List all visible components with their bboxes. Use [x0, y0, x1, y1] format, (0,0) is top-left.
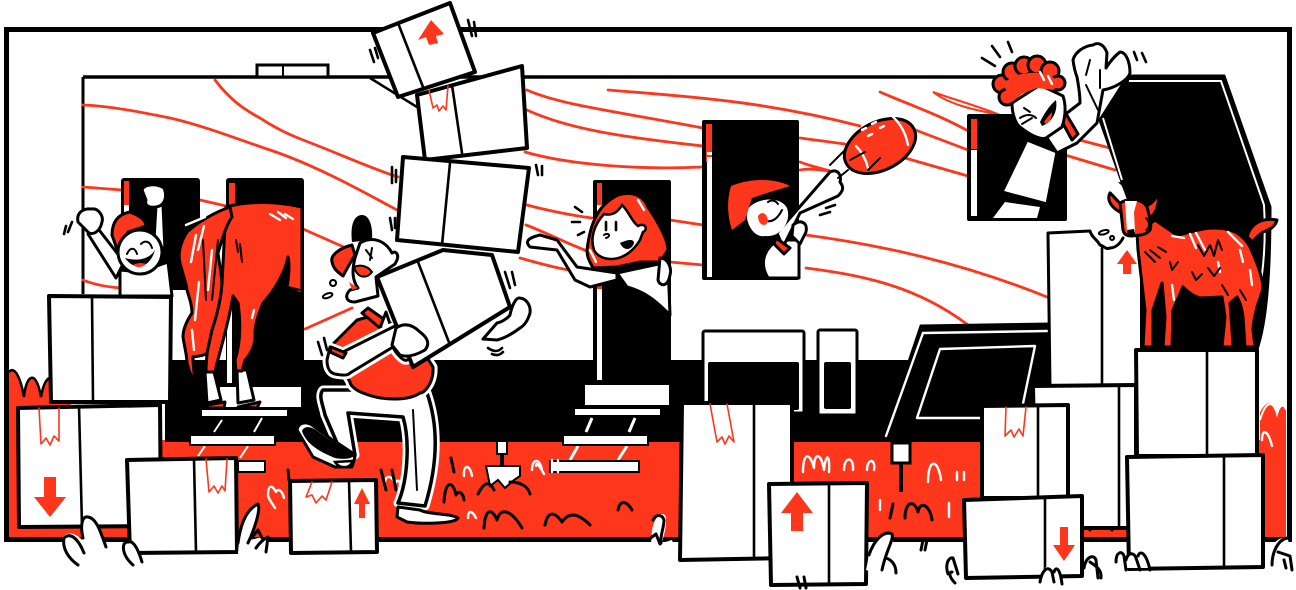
red wave stripes [83, 80, 1115, 329]
window: curly man [967, 114, 1067, 221]
box: with tape [982, 405, 1068, 498]
door: kid [121, 178, 200, 290]
curly man arms [1047, 44, 1130, 153]
grass tufts on ground [268, 432, 1272, 530]
box: front [127, 458, 237, 553]
rear trailer opening [1100, 76, 1270, 352]
man collar [362, 308, 388, 328]
ground [9, 370, 1286, 537]
football [830, 107, 925, 185]
goat [1109, 183, 1277, 347]
person: cheering kid [64, 185, 172, 296]
box: bottom right [1127, 455, 1263, 569]
white tuft masks [63, 516, 142, 566]
trailer jacks [486, 441, 910, 492]
icon: right fist [142, 185, 166, 207]
horse [179, 202, 302, 408]
box stack on man [318, 3, 542, 367]
ramp [884, 324, 1050, 436]
person: woman [527, 193, 671, 315]
box: tall under goat's bite [1048, 230, 1140, 386]
goat body [1137, 220, 1263, 347]
box: top tilted [373, 3, 475, 97]
woman hair [587, 193, 668, 268]
box: up arrow small [290, 480, 377, 553]
person: thrower [728, 171, 843, 278]
thrower hair and head [747, 200, 788, 236]
bottom grass tufts [63, 503, 1294, 588]
box: second [417, 66, 527, 160]
box: top [49, 296, 171, 402]
box: third [397, 157, 529, 252]
horse tail [179, 207, 232, 382]
man front shoe [397, 507, 458, 523]
box: lower right [1033, 385, 1136, 528]
man back shoe [297, 423, 355, 467]
person: curly hair man [982, 42, 1146, 218]
boxes: centre [680, 403, 867, 585]
sweat drops [323, 280, 336, 298]
person: man carrying boxes [297, 215, 458, 523]
boxes: goat stack [964, 350, 1263, 578]
boxes: right side behind goat [1033, 230, 1140, 528]
man shirt [330, 315, 433, 399]
man arm [327, 323, 427, 375]
window: thrower [702, 120, 799, 280]
icon: left fist [78, 209, 102, 234]
box: up arrow [769, 483, 867, 585]
goat head [1120, 200, 1151, 236]
lower windows [703, 330, 857, 415]
goat tail [1247, 219, 1277, 242]
man far hand [483, 298, 530, 340]
box: held [377, 250, 510, 367]
man head [347, 240, 398, 302]
box: down arrow [18, 405, 161, 527]
man arm halo [327, 323, 427, 375]
trailer body [83, 65, 1135, 442]
goat horns [1120, 183, 1156, 200]
horse socks [205, 372, 221, 403]
man cap [351, 215, 372, 242]
box: tall centre [680, 403, 792, 560]
box: down arrow [964, 496, 1082, 578]
horse body [206, 202, 302, 372]
man shirt halo [330, 315, 433, 399]
door: woman [593, 180, 671, 385]
boxes: left stack [18, 296, 377, 553]
man hand on box [392, 325, 428, 356]
steps: woman door [550, 385, 669, 472]
steps: horse door [190, 410, 287, 472]
curly hair [993, 56, 1065, 105]
man trousers [321, 390, 435, 506]
door: horse [173, 178, 304, 408]
box: goat perch [1136, 350, 1257, 456]
goat ears [1109, 193, 1122, 212]
man trousers halo [321, 390, 435, 506]
